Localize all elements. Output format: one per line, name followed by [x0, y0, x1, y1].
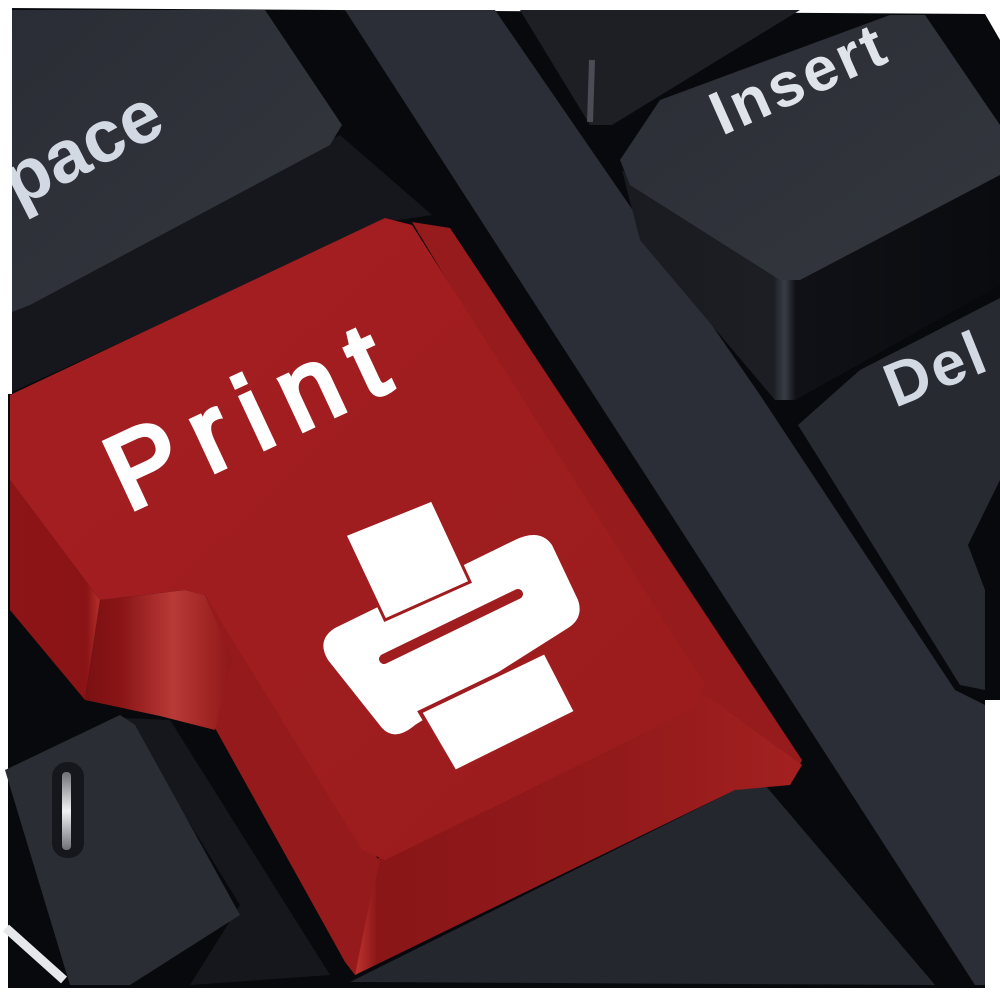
- printer slot: [384, 594, 518, 659]
- delete key body: [798, 298, 1000, 690]
- icon: printer: [323, 500, 580, 772]
- red key right side: [412, 222, 802, 785]
- panel: lower left key: [5, 715, 330, 985]
- lower left key side face: [125, 718, 330, 985]
- partial key face: [520, 10, 800, 125]
- panel: delete key: [798, 298, 1000, 690]
- space key front face: [12, 135, 432, 392]
- panel: top partial key: [520, 10, 800, 125]
- lower left key top face: [5, 715, 240, 985]
- diagonal keyboard bar: [345, 10, 985, 985]
- printer paper feed: [345, 500, 470, 620]
- indicator light lower: [6, 928, 64, 980]
- panel: red print key: [10, 218, 802, 975]
- panel: space key: [0, 10, 432, 392]
- delete key label: Del: [874, 317, 998, 421]
- insert key front face: [622, 170, 1000, 400]
- print label: Print: [88, 294, 421, 533]
- partial key edge highlight: [590, 60, 592, 122]
- insert key label: Insert: [700, 10, 898, 149]
- printer body: [323, 535, 580, 734]
- red key left side: [10, 480, 100, 700]
- space key top face: [12, 10, 342, 312]
- printer output paper: [420, 652, 576, 772]
- red key inner corner: [85, 590, 232, 730]
- panel: lower key: [350, 785, 935, 985]
- indicator light upper glow: [62, 772, 71, 850]
- panel: insert key: [620, 10, 1000, 400]
- insert key top face: [620, 15, 1000, 280]
- page margin left: [0, 0, 12, 394]
- red key lower front: [355, 695, 802, 975]
- red key top face: [10, 218, 705, 860]
- red key stem side: [205, 595, 380, 975]
- indicator light upper: [52, 762, 84, 858]
